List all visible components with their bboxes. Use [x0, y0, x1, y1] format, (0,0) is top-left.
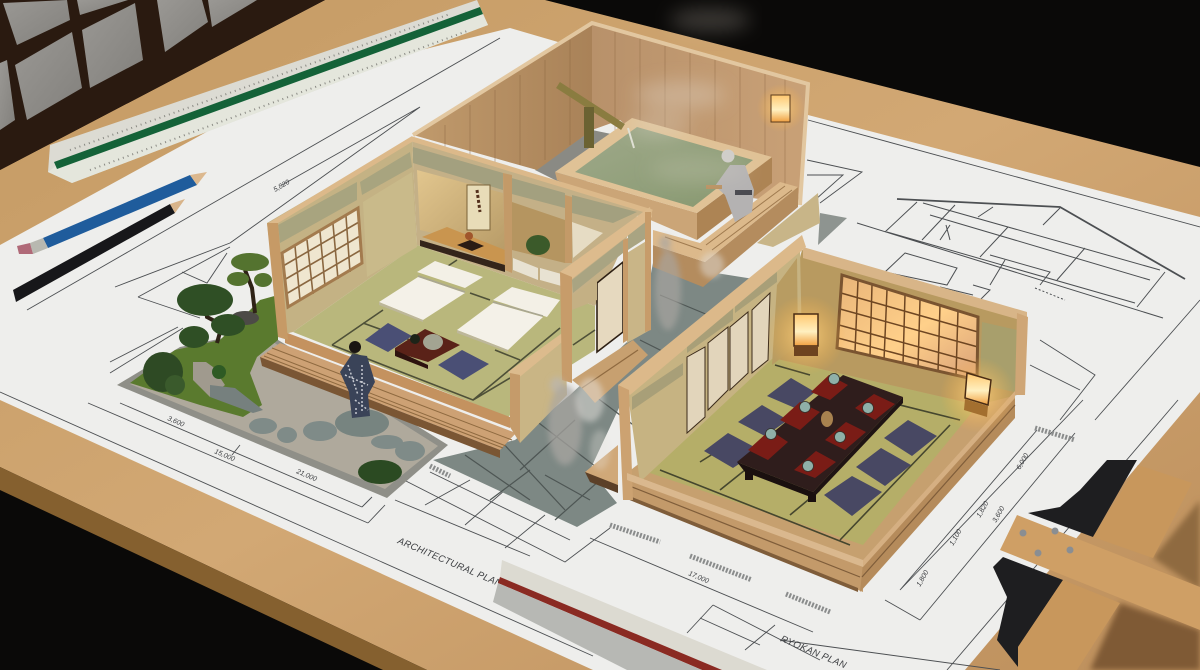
shrubs — [143, 352, 402, 484]
low dining table — [737, 375, 903, 502]
dimension: 17,000: 17,000 — [687, 570, 710, 585]
front low wall — [508, 331, 567, 443]
hanging scroll — [467, 185, 490, 230]
low tea table with teapot — [395, 329, 460, 369]
lit shoji screen — [837, 275, 978, 380]
pillars — [503, 173, 512, 273]
bath room — [413, 23, 808, 287]
left wall — [267, 138, 417, 335]
bamboo spout — [558, 85, 634, 148]
dimension: 5,820: 5,820 — [272, 179, 291, 194]
back wall — [412, 140, 650, 306]
blue cushions — [365, 323, 489, 380]
flower arrangement — [457, 232, 484, 251]
rock — [193, 311, 263, 413]
left cedar wall — [413, 23, 592, 170]
top scale ruler — [48, 0, 488, 183]
wooden bathtub — [555, 118, 772, 240]
seat cushions — [704, 378, 937, 516]
rear wall — [773, 250, 1027, 405]
lower black cap — [993, 557, 1063, 667]
visitor figure in yukata — [335, 341, 389, 437]
right cedar wall — [592, 23, 808, 205]
label: architectural plan: ARCHITECTURAL PLAN — [395, 535, 504, 590]
futons — [379, 261, 560, 352]
steam above bath — [630, 8, 750, 184]
door in back wall — [572, 222, 603, 258]
front and right wood edges — [627, 473, 863, 567]
blue pencil — [17, 172, 207, 254]
small side deck — [585, 445, 618, 493]
wall top edges — [270, 139, 652, 225]
moss — [130, 295, 278, 417]
T-square tool — [993, 460, 1200, 670]
crossbar — [1000, 515, 1200, 630]
cedar deck — [653, 182, 798, 287]
wall top edge — [413, 23, 808, 205]
right post — [1015, 313, 1028, 395]
right floor lantern — [940, 357, 1016, 433]
shoji window in background — [0, 0, 325, 170]
black pencil — [13, 199, 185, 302]
plan labels — [166, 179, 1031, 670]
dimension: 1,820: 1,820 — [976, 500, 991, 519]
bonsai trees — [177, 253, 272, 348]
front sill — [285, 332, 510, 428]
house elevation drawing — [857, 199, 1185, 318]
bedroom — [260, 138, 652, 458]
lower wooden arm — [1018, 580, 1120, 670]
blurred moving figures and steam — [548, 236, 724, 470]
dimension: 3,600: 3,600 — [166, 415, 185, 429]
left floor lantern — [766, 295, 846, 375]
steps — [572, 340, 648, 403]
outer base and inner wood — [627, 358, 1015, 563]
tatami borders — [332, 260, 595, 400]
upper black cap — [1028, 460, 1137, 537]
partition wall with door — [560, 207, 652, 383]
dining room — [585, 193, 1028, 592]
tatami floor — [293, 245, 595, 417]
gravel floor — [535, 130, 640, 190]
table front lip — [0, 467, 427, 670]
cedar veranda — [260, 343, 516, 458]
red trays with tea cups — [748, 374, 895, 478]
tatami floor — [647, 358, 978, 545]
wall lantern — [757, 84, 805, 132]
dimension: 3,600 right: 3,600 — [992, 505, 1007, 524]
dimension: 6,000: 6,000 — [1016, 452, 1031, 471]
dimension: 15,000: 15,000 — [213, 448, 236, 463]
dimension: 21,000: 21,000 — [294, 468, 318, 483]
tokonoma alcove — [417, 170, 505, 250]
rear wall stub — [757, 193, 820, 247]
bottom scale ruler — [493, 560, 767, 670]
hot water — [575, 127, 753, 207]
stepping stones — [249, 418, 425, 461]
left corner post — [267, 223, 288, 340]
left wall shoji window — [282, 208, 362, 307]
left wall with closet doors — [618, 235, 806, 500]
garden base — [117, 253, 448, 498]
upper wooden arm — [1093, 465, 1192, 558]
stone paving path — [433, 263, 760, 527]
dimension: 1,100: 1,100 — [949, 528, 964, 547]
shelf nook and plant — [512, 202, 565, 287]
bather figure — [706, 150, 754, 222]
dimension: 1,800: 1,800 — [916, 569, 931, 588]
small paving patch — [818, 213, 847, 245]
rear wall top edge — [803, 247, 1027, 322]
table shadows — [1153, 500, 1200, 590]
hatched wall bands on plan — [430, 428, 1075, 612]
